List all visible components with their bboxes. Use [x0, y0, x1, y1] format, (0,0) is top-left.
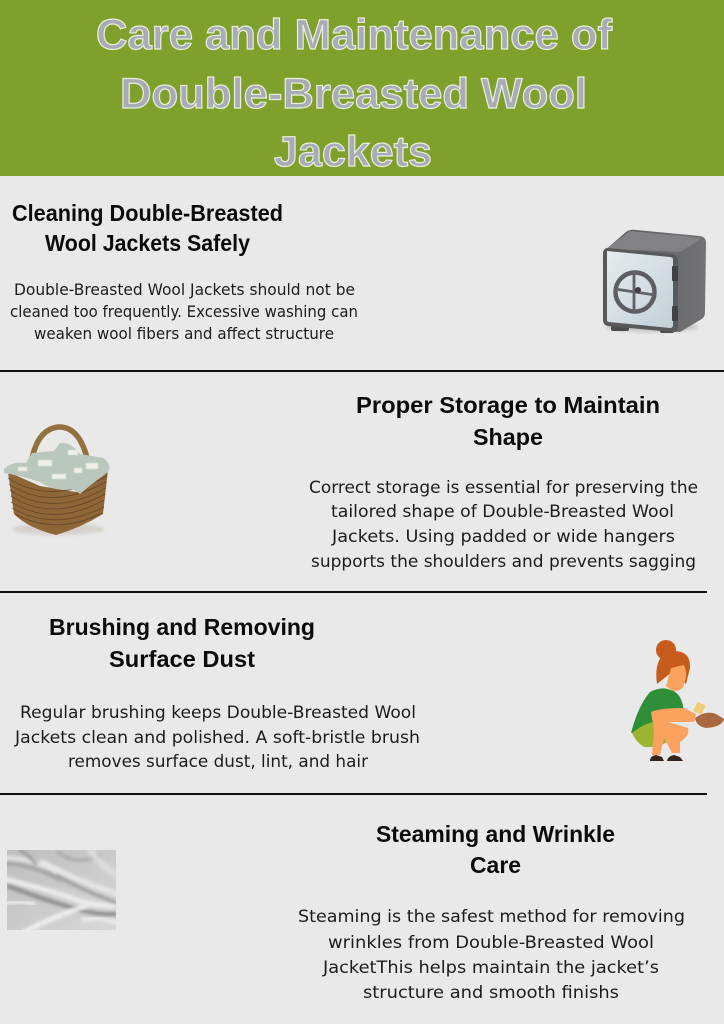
text: storage: supports the shoulders and prevents sagging — [311, 552, 696, 572]
text: storage: Jackets. Using padded or wide hangers — [331, 527, 675, 547]
icon: safe — [603, 230, 706, 333]
text: cleaning: Double-Breasted Wool Jackets should not be — [14, 281, 355, 299]
heading: cleaning: Wool Jackets Safely — [45, 230, 250, 256]
title: Double-Breasted Wool — [120, 70, 587, 118]
panel: steaming — [0, 821, 685, 1003]
panel: brushing — [14, 614, 724, 772]
panel: storage — [4, 392, 698, 572]
heading: brushing: Brushing and Removing — [49, 614, 315, 640]
heading: steaming: Steaming and Wrinkle — [376, 821, 615, 847]
text: steaming: Steaming is the safest method for removing — [298, 907, 685, 927]
title — [96, 11, 613, 176]
text: steaming — [298, 907, 685, 1003]
text: storage: Correct storage is essential for preserving the — [309, 478, 698, 498]
heading: brushing — [49, 614, 315, 672]
icon: basket — [4, 427, 109, 535]
text: brushing: Regular brushing keeps Double-Breasted Wool — [20, 703, 416, 723]
title: Jackets — [274, 128, 432, 176]
divider — [0, 793, 707, 795]
text: cleaning: weaken wool fibers and affect structure — [34, 325, 334, 343]
icon: woman brushing shoe — [631, 640, 724, 761]
text: cleaning: cleaned too frequently. Excessive washing can — [10, 303, 358, 321]
heading: storage: Proper Storage to Maintain — [356, 392, 660, 418]
image: wrinkled fabric — [7, 850, 116, 930]
divider — [0, 370, 724, 372]
text: storage: tailored shape of Double-Breasted Wool — [331, 502, 674, 522]
text: brushing: Jackets clean and polished. A soft-bristle brush — [14, 728, 420, 748]
text: storage — [309, 478, 698, 572]
title banner — [0, 0, 724, 176]
divider — [0, 591, 707, 593]
text: steaming: wrinkles from Double-Breasted Wool — [328, 933, 654, 953]
text: steaming: structure and smooth finishs — [363, 983, 619, 1003]
text: brushing — [14, 703, 420, 772]
heading: storage — [356, 392, 660, 450]
heading: steaming — [376, 821, 615, 878]
heading: cleaning: Cleaning Double-Breasted — [12, 200, 283, 226]
heading: brushing: Surface Dust — [109, 646, 255, 672]
panel: cleaning — [10, 200, 706, 343]
text: cleaning — [10, 281, 358, 343]
heading: cleaning — [12, 200, 283, 256]
heading: storage: Shape — [473, 424, 543, 450]
text: steaming: JacketThis helps maintain the jacket’s — [322, 958, 659, 978]
heading: steaming: Care — [470, 852, 521, 878]
title: Care and Maintenance of — [96, 11, 613, 59]
text: brushing: removes surface dust, lint, and hair — [68, 752, 368, 772]
